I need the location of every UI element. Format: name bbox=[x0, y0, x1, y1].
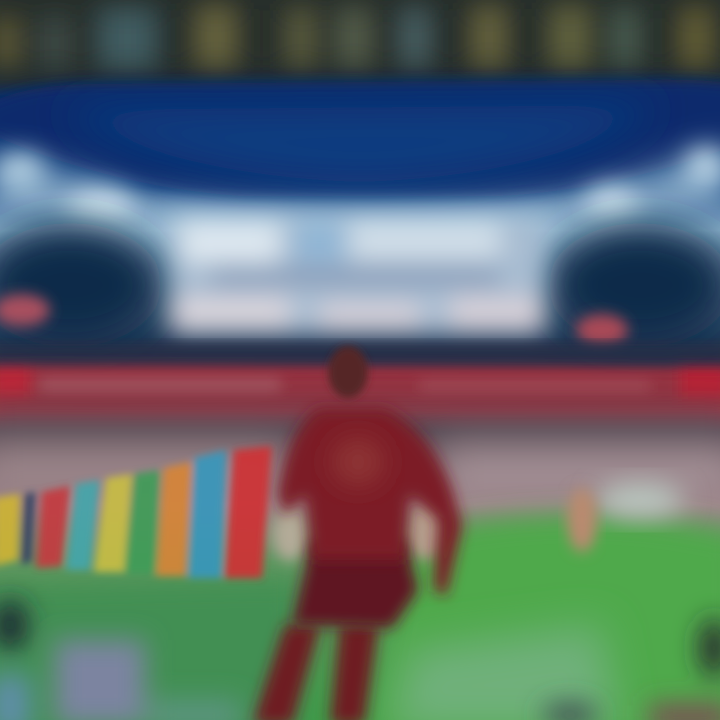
dark band below scoreboard bbox=[0, 344, 720, 364]
distant player on pitch bbox=[567, 488, 597, 552]
player: shorts bbox=[292, 540, 418, 628]
player: central figure seen from behind bbox=[252, 346, 462, 720]
colored banner bars bbox=[0, 446, 272, 578]
pitch: green field bbox=[0, 515, 720, 720]
red advertising band bbox=[0, 366, 720, 408]
pale patch on the pitch bbox=[390, 625, 620, 720]
floodlights: bright arc bbox=[0, 150, 720, 240]
player: jersey highlight bbox=[332, 438, 384, 486]
red spots in the side stands bbox=[0, 294, 628, 346]
scoreboard glow: central mottled block bbox=[170, 218, 545, 334]
player: legs bbox=[252, 625, 378, 720]
player: jersey bbox=[278, 408, 462, 596]
stands: upper tier with yellow and teal patches bbox=[0, 0, 720, 78]
foreground spectators: left bbox=[0, 599, 240, 720]
white glow at the far side of the pitch bbox=[596, 482, 684, 518]
player: arm and hand glow bbox=[273, 504, 446, 561]
player: head bbox=[328, 346, 368, 398]
crowd: grey-pink lower stands bbox=[0, 416, 720, 494]
dark blue side stands bbox=[0, 223, 720, 347]
foreground spectators: right bbox=[542, 618, 720, 720]
roof canopy: deep blue arc bbox=[0, 80, 720, 196]
